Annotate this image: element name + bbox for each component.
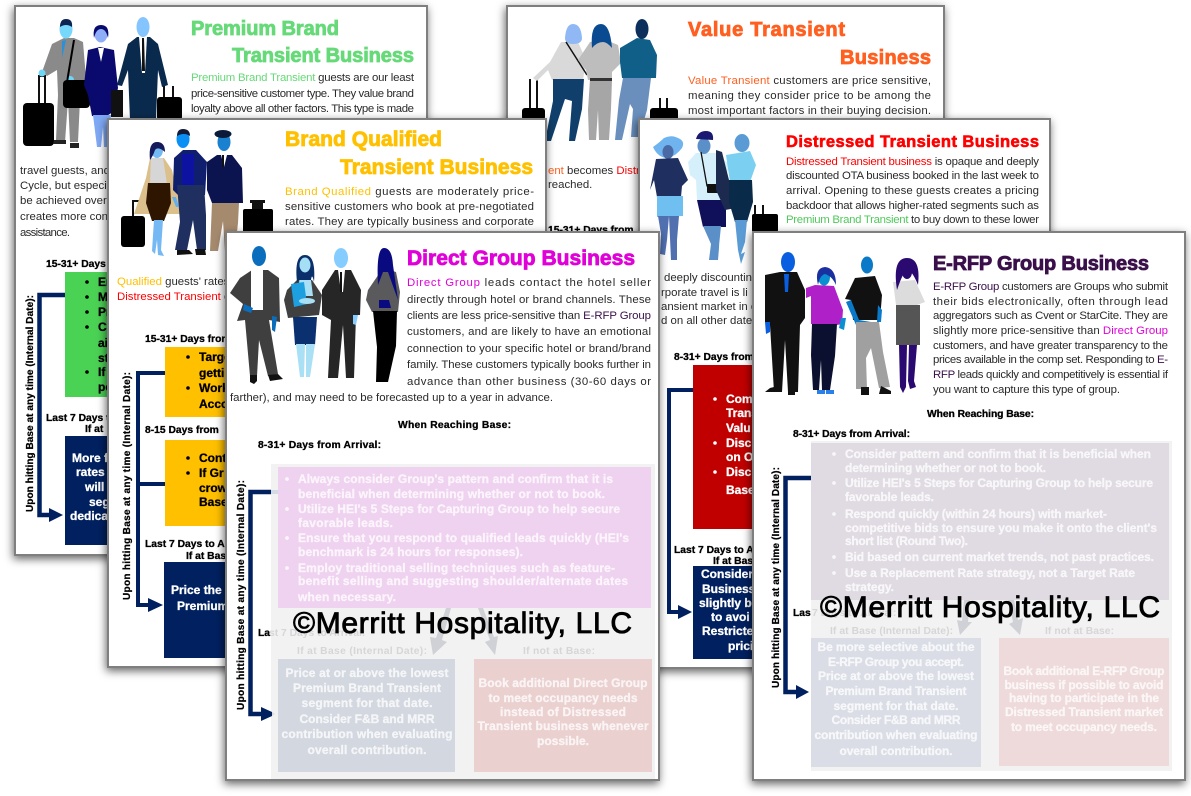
box: mauve group guidance: Use a Replacement Rate strategy, not a Target Rate	[845, 566, 1135, 580]
vertical label: Upon hitting Base at any time (Internal Date):	[236, 480, 247, 710]
box: red not at base	[999, 638, 1169, 766]
body text: Value Transient intro: ent becomes Distr	[548, 165, 640, 177]
body text: Direct Group intro	[230, 277, 651, 404]
body text: Brand Qualified intro: Distressed Transient c	[117, 291, 230, 303]
title: Value Transient Business: Business	[840, 47, 931, 69]
body text: Distressed Transient intro: backdoor that allows higher-rated segments such as	[786, 200, 1039, 212]
box: amber 8-15 days: Cont	[199, 451, 226, 465]
box: navy price: Premium	[177, 599, 228, 613]
panel: Value Transient Business	[507, 6, 944, 426]
box: red not at base: possible.	[537, 734, 589, 748]
heading: When Reaching Base: When Reaching Base:	[927, 409, 1034, 420]
box: blue at base: Consider F&B and MRR	[832, 713, 961, 727]
label: 8-31+ days: 8-31+ Days from	[674, 352, 754, 363]
box: red not at base: Book additional Direct Group	[478, 676, 648, 690]
body text: Distressed Transient intro: deeply discountin	[664, 272, 752, 284]
heading: When Reaching Base: When Reaching Base:	[398, 420, 511, 431]
label: 15-31+ days: 15-31+ Days from	[548, 225, 634, 236]
box: blue at base: Premium Brand Transient	[826, 684, 966, 698]
label: last 7 days	[46, 413, 110, 435]
body text: Distressed Transient intro: discounted OTA business booked in the last week to	[786, 170, 1039, 182]
box: navy consider: Considere	[701, 567, 760, 581]
arrow: base flow	[250, 490, 278, 721]
body text: Value Transient intro: most important factors in their buying decision.	[688, 105, 931, 117]
box: mauve group guidance: Bid based on current market trends, not past practices.	[845, 550, 1154, 564]
box: navy price: Price the	[171, 583, 222, 597]
label: last 7 days: Last 7 Days to A	[674, 545, 754, 556]
body text: Premium Brand intro: be achieved over s	[20, 195, 116, 207]
body text: Brand Qualified intro: sensitive customers who book at pre-negotiated	[285, 201, 534, 213]
body text: Distressed Transient intro: Premium Brand Transient to buy down to these lower	[786, 214, 1039, 226]
box: pink group guidance: Always consider Group's pattern and confirm that it is	[298, 472, 613, 486]
body text: E-RFP intro: E-RFP Group customers are Groups who submit	[933, 281, 1169, 293]
box: red not at base: instead of Distressed	[500, 705, 626, 719]
illustration: direct group people	[230, 246, 400, 384]
box: green rate strategy: En	[98, 275, 113, 289]
label: last 7 days: 7 Days to Arrival:	[812, 608, 896, 619]
box: blue at base	[278, 659, 455, 772]
label: if at base: If at Base (Internal Date):	[830, 626, 953, 637]
box: pink group guidance: beneficial when determining whether or not to book.	[298, 487, 605, 501]
vertical label: Upon hitting Base at any time (Internal Date):	[122, 372, 133, 600]
body text: Brand Qualified intro: Brand Qualified guests are moderately price-	[285, 186, 534, 198]
body text: Value Transient intro: reached.	[548, 179, 592, 191]
box: mauve group guidance: determining whether or not to book.	[845, 461, 1046, 475]
arrow: base flow	[138, 373, 165, 612]
box: mauve group guidance: strategy.	[845, 580, 894, 594]
title: Value Transient Business	[688, 19, 931, 69]
box: blue at base: contribution when evaluating	[814, 728, 978, 742]
box: pink group guidance: favorable leads.	[298, 516, 393, 530]
box: navy price	[164, 562, 228, 658]
body text: Value Transient intro: Value Transient customers are price sensitive,	[688, 75, 931, 87]
box: navy last 7 days: will	[84, 480, 104, 494]
box: pink group guidance: benchmark is 24 hours for responses).	[298, 545, 523, 559]
label: last 7 days	[145, 539, 226, 562]
body text: E-RFP intro: aggregators such as Cvent or StarCite. They are	[933, 310, 1168, 322]
box: green rate strategy: If	[98, 365, 106, 379]
panel: Distressed Transient Business	[639, 119, 1050, 668]
box: blue at base: contribution when evaluating	[282, 727, 452, 741]
illustration: premium brand travellers	[23, 17, 182, 148]
label: last 7 days: Las	[793, 608, 811, 619]
body text: E-RFP intro: their bids electronically, often through lead	[933, 296, 1168, 308]
box: red not at base: to meet occupancy needs.	[1011, 720, 1157, 734]
box: red not at base: Book additional E-RFP Group	[1004, 664, 1164, 678]
box: red strategy: Com	[726, 392, 753, 406]
vertical label: Upon hitting Base at any time (Internal Date):	[25, 295, 36, 512]
body text: Premium Brand intro: assistance.	[20, 227, 70, 239]
illustration: distressed leisure travellers	[650, 131, 778, 264]
title: Premium Brand Transient Business: Transient Business	[232, 45, 414, 67]
faded content panel	[793, 441, 1172, 771]
body text: Direct Group intro: farther), and may need to be forecasted up to a year in advance.	[230, 392, 553, 404]
box: mauve group guidance: favorable leads.	[845, 490, 934, 504]
box: red strategy: Base	[726, 483, 755, 497]
label: if at base: If at Base (Internal Date):	[297, 646, 427, 657]
box: red strategy: Valu	[726, 421, 751, 435]
box: mauve group guidance	[811, 443, 1169, 600]
body text: Premium Brand intro	[20, 72, 415, 239]
body text: Brand Qualified intro	[117, 186, 534, 303]
label: last 7 days: If at	[85, 424, 104, 435]
title: Direct Group Business: Direct Group Business	[407, 247, 635, 270]
title: Distressed Transient Business: Distressed Transient Business	[786, 133, 1039, 151]
faded content panel	[258, 464, 655, 779]
box: amber 8-15 days: Base	[199, 495, 228, 509]
body text: Premium Brand intro: price-sensitive customer type. They value brand	[191, 88, 414, 100]
label: if not at base: If not at Base:	[523, 646, 595, 657]
box: mauve group guidance: short list (Round Two).	[845, 534, 968, 548]
box: pink group guidance: Utilize HEI's 5 Steps for Capturing Group to help secure	[298, 502, 620, 516]
box: blue at base: Premium Brand Transient	[293, 681, 441, 695]
body text: Distressed Transient intro: arrival. Opening to these guests creates a pricing	[786, 185, 1039, 197]
illustration: e-rfp group people	[765, 252, 925, 395]
label: last 7 days: If at Bas	[186, 551, 226, 562]
label: 8-31+ days: 8-31+ Days from Arrival:	[793, 429, 910, 440]
box: navy consider: to avoi	[711, 610, 750, 624]
body text: Direct Group intro: connection to your specific hotel or brand/brand	[407, 343, 651, 355]
box: navy last 7 days: seg	[89, 495, 110, 509]
box: green rate strategy: po	[98, 380, 113, 394]
box: red strategy: on O	[726, 450, 753, 464]
box: amber 15-31 days: Targe	[199, 350, 231, 364]
body text: E-RFP intro: RFP leads quickly and competitively is essential if	[933, 369, 1169, 381]
body text: E-RFP intro: you want to capture this type of group.	[933, 384, 1120, 396]
body text: Direct Group intro: customers, and are likely to have an emotional	[407, 326, 651, 338]
box: red strategy: Disc	[726, 465, 752, 479]
body text: Premium Brand intro: Premium Brand Transient guests are our least	[191, 72, 415, 84]
box: blue at base: Price at or above the lowest	[818, 669, 974, 683]
box: red not at base: Distressed Transient market	[1005, 705, 1163, 719]
box: pink group guidance	[278, 467, 651, 608]
box: mauve group guidance: competitive bids to ensure you make it onto the client's	[845, 521, 1157, 535]
body text: Premium Brand intro: loyalty above all other factors. This type is made	[191, 103, 414, 115]
body text: Premium Brand intro: creates more cont	[20, 211, 112, 223]
title: Premium Brand Transient Business: Premium Brand	[191, 18, 339, 40]
panel: Brand Qualified Transient Business	[108, 119, 546, 667]
panel: Direct Group Business	[226, 232, 659, 780]
body text: Brand Qualified intro: Qualified guests' rates	[117, 276, 230, 288]
illustration: value travellers	[522, 19, 678, 141]
body text: Direct Group intro: Direct Group leads contact the hotel seller	[407, 277, 651, 289]
box: navy consider: slightly b	[699, 596, 752, 610]
label: 8-31+ days: 8-31+ Days from Arrival:	[258, 440, 381, 451]
label: last 7 days: Last 7 Days to A	[145, 539, 225, 550]
box: blue at base: E-RFP Group you accept.	[828, 655, 964, 669]
label: 15-31+ days: 15-31+ Days from	[145, 334, 231, 345]
box: blue at base: Be more selective about the	[818, 640, 975, 654]
body text: Premium Brand intro: Cycle, but especial	[20, 180, 116, 192]
arrow: base flow	[786, 478, 811, 699]
box: amber 15-31 days: Accou	[199, 397, 236, 411]
body text: Distressed Transient intro: d on all other dates	[661, 315, 758, 327]
box: navy consider: Restricte	[702, 624, 754, 638]
box: green rate strategy: Co	[98, 320, 114, 334]
label: 8-15 days: 8-15 Days from	[145, 425, 219, 436]
body text: Direct Group intro: family. These customers typically books further in	[407, 359, 651, 371]
arrows: faded split	[430, 608, 498, 655]
title: Brand Qualified Transient Business: Brand Qualified	[285, 128, 442, 151]
box: red strategy: Disc	[726, 436, 752, 450]
box: red not at base: Transient business whenever	[478, 719, 649, 733]
box: blue at base: Consider F&B and MRR	[300, 712, 435, 726]
vertical label: Upon hitting Base at any time (Internal Date):	[771, 467, 782, 688]
body text: Direct Group intro: clients are less price-sensitive than E-RFP Group	[407, 310, 651, 322]
panel: E-RFP Group Business	[753, 232, 1185, 780]
box: red not at base: to meet occupancy needs	[488, 691, 638, 705]
body text: Value Transient intro: meaning they consider price to be among the	[688, 90, 931, 102]
box: red not at base	[474, 659, 652, 772]
box: green rate strategy: M	[98, 290, 108, 304]
box: mauve group guidance: Respond quickly (within 24 hours) with market-	[845, 507, 1107, 521]
box: mauve group guidance: Utilize HEI's 5 Steps for Capturing Group to help secure	[845, 476, 1153, 490]
box: navy consider: prici	[728, 639, 753, 653]
box: navy last 7 days: rates	[76, 465, 105, 479]
label: last 7 days: La	[258, 628, 270, 639]
box: amber 8-15 days: If Gr	[199, 466, 224, 480]
title: Brand Qualified Transient Business	[285, 128, 533, 179]
box: pink group guidance: Ensure that you respond to qualified leads quickly (HEI's	[298, 531, 629, 545]
box: pink group guidance: Employ traditional selling techniques such as feature-	[298, 561, 615, 575]
illustration: brand qualified travellers	[121, 129, 273, 256]
box: blue at base: overall contribution.	[308, 743, 426, 757]
box: green rate strategy: st	[98, 351, 109, 365]
title: Premium Brand Transient Business	[191, 18, 414, 67]
box: navy last 7 days: More f	[72, 451, 109, 465]
arrow: base flow	[40, 295, 65, 522]
box: amber 15-31 days: Work	[199, 381, 229, 395]
watermark: copyright: ©Merritt Hospitality, LLC	[820, 591, 1160, 624]
body text: Distressed Transient intro: ansient market in or	[661, 301, 761, 313]
box: red strategy: Trans	[726, 406, 758, 420]
box: navy last 7 days	[65, 436, 125, 545]
body text: Distressed Transient intro: rporate travel is li	[661, 287, 748, 299]
body text: Brand Qualified intro: rates. They are typically business and corporate	[285, 216, 534, 228]
box: pink group guidance: when necessary.	[297, 590, 396, 604]
box: green rate strategy	[65, 272, 125, 397]
box: amber 8-15 days: crow	[199, 481, 228, 495]
box: blue at base: segment for that date.	[834, 699, 958, 713]
body text: Direct Group intro: advance than other business (30-60 days or	[407, 376, 651, 388]
body text: E-RFP intro: slightly more price-sensitive than Direct Group	[933, 325, 1168, 337]
panel: Premium Brand Transient Business	[15, 6, 427, 555]
box: red not at base: business if possible to avoid	[1004, 678, 1164, 692]
title: E-RFP Group Business: E-RFP Group Business	[933, 253, 1149, 275]
title: Brand Qualified Transient Business: Transient Business	[340, 156, 533, 179]
box: amber 8-15 days	[165, 440, 228, 526]
body text: E-RFP intro: customers, and have greater transparency to the	[933, 340, 1168, 352]
body text: Premium Brand intro: travel guests, and a	[20, 165, 120, 177]
body text: Direct Group intro: directly through hotel or brand channels. These	[407, 294, 651, 306]
box: green rate strategy: Pr	[98, 305, 111, 319]
box: red not at base: having to participate in the	[1009, 691, 1159, 705]
body text: Value Transient intro	[548, 75, 931, 191]
box: red strategy	[693, 365, 758, 529]
box: blue at base: overall contribution.	[840, 744, 952, 758]
box: navy consider	[693, 566, 760, 659]
box: pink group guidance: benefit selling and suggesting shoulder/alternate dates	[298, 574, 628, 588]
arrows: faded split	[957, 600, 1023, 635]
body text: Distressed Transient intro: Distressed Transient business is opaque and deeply	[786, 156, 1039, 168]
body text: E-RFP intro	[933, 281, 1169, 396]
box: blue at base: Price at or above the lowest	[286, 666, 448, 680]
label: if not at base: If not at Base:	[1045, 626, 1114, 637]
arrow: base flow	[669, 390, 693, 619]
box: green rate strategy: ai	[98, 336, 108, 350]
box: navy last 7 days: dedica	[70, 509, 108, 523]
watermark: copyright: ©Merritt Hospitality, LLC	[293, 607, 632, 640]
box: navy consider: Business	[702, 582, 756, 596]
label: last 7 days	[674, 545, 754, 567]
box: amber 15-31 days	[165, 347, 236, 417]
label: last 7 days: Last 7 Days t	[46, 413, 110, 424]
box: blue at base	[811, 638, 981, 767]
label: last 7 days: st 7 Days to Arrival:	[269, 628, 365, 639]
body text: Distressed Transient intro	[661, 156, 1039, 327]
label: 15-31+ days: 15-31+ Days	[46, 259, 106, 270]
label: last 7 days: If at Bas	[713, 556, 753, 567]
box: amber 15-31 days: gettin	[199, 366, 232, 380]
box: mauve group guidance: Consider pattern and confirm that it is beneficial when	[845, 447, 1151, 461]
body text: E-RFP intro: prices available in the comp set. Responding to E-	[933, 354, 1168, 366]
title: Value Transient Business: Value Transient	[688, 19, 845, 41]
box: blue at base: segment for that date.	[302, 696, 432, 710]
